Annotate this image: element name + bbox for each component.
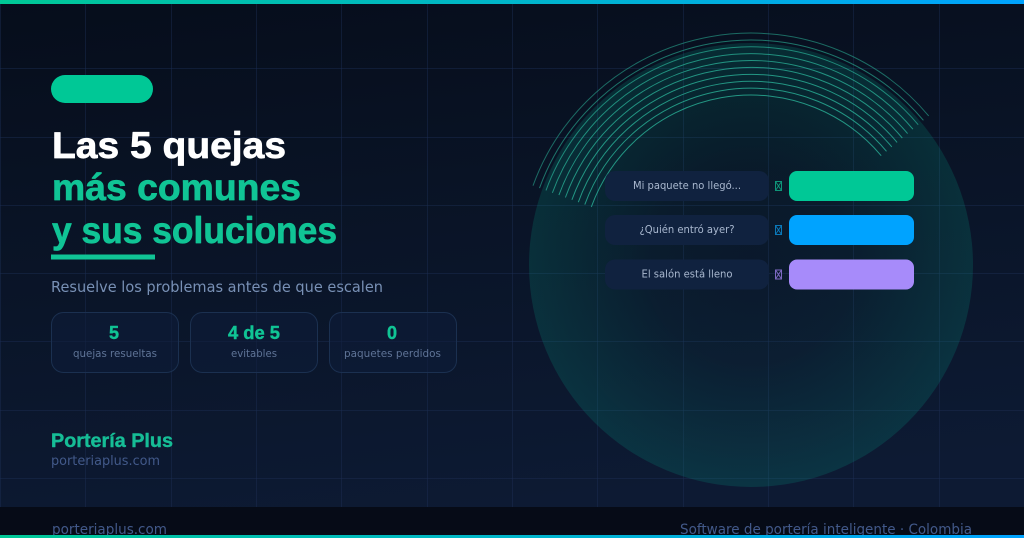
stat card: paquetes perdidos bbox=[330, 312, 456, 372]
chat row 2: ¿Quién entró ayer? bbox=[640, 223, 735, 236]
icon: missing glyph arrow blue bbox=[776, 226, 782, 234]
stat card: quejas resueltas: quejas resueltas bbox=[73, 347, 157, 360]
footer band bbox=[0, 507, 1024, 538]
title line 2: más comunes bbox=[52, 167, 301, 208]
decorative disc bbox=[529, 43, 973, 487]
footer url: porteriaplus.com bbox=[52, 522, 167, 538]
stat card: quejas resueltas bbox=[52, 312, 178, 372]
top accent bar bbox=[0, 0, 1024, 4]
stat card: paquetes perdidos: 0 bbox=[387, 323, 397, 343]
footer tagline: Software de portería inteligente · Colombia bbox=[680, 522, 972, 538]
chat row 1 bbox=[605, 171, 914, 201]
stat card: evitables: evitables bbox=[231, 347, 277, 360]
icon: missing glyph arrow purple bbox=[776, 270, 782, 279]
stat card: evitables bbox=[190, 312, 318, 372]
concentric arcs bbox=[533, 33, 929, 207]
title bbox=[52, 125, 337, 251]
title line 3: y sus soluciones bbox=[52, 210, 337, 251]
title underline bbox=[51, 254, 155, 260]
stat card: evitables: 4 de 5 bbox=[228, 323, 280, 343]
brand name: Portería Plus bbox=[51, 430, 173, 452]
chat row 2 bbox=[605, 215, 914, 245]
stat card: quejas resueltas: 5 bbox=[109, 323, 119, 343]
stat card: paquetes perdidos: paquetes perdidos bbox=[344, 347, 441, 360]
title line 1: Las 5 quejas bbox=[52, 125, 286, 166]
chat row 1: Mi paquete no llegó... bbox=[633, 179, 741, 192]
badge pill bbox=[51, 75, 153, 103]
bottom accent bar bbox=[0, 535, 1024, 538]
icon: missing glyph arrow green bbox=[776, 182, 782, 190]
brand url: porteriaplus.com bbox=[51, 454, 160, 469]
subtitle: Resuelve los problemas antes de que escalen bbox=[51, 278, 383, 296]
chat row 3 bbox=[605, 260, 914, 290]
chat row 3: El salón está lleno bbox=[642, 268, 733, 280]
